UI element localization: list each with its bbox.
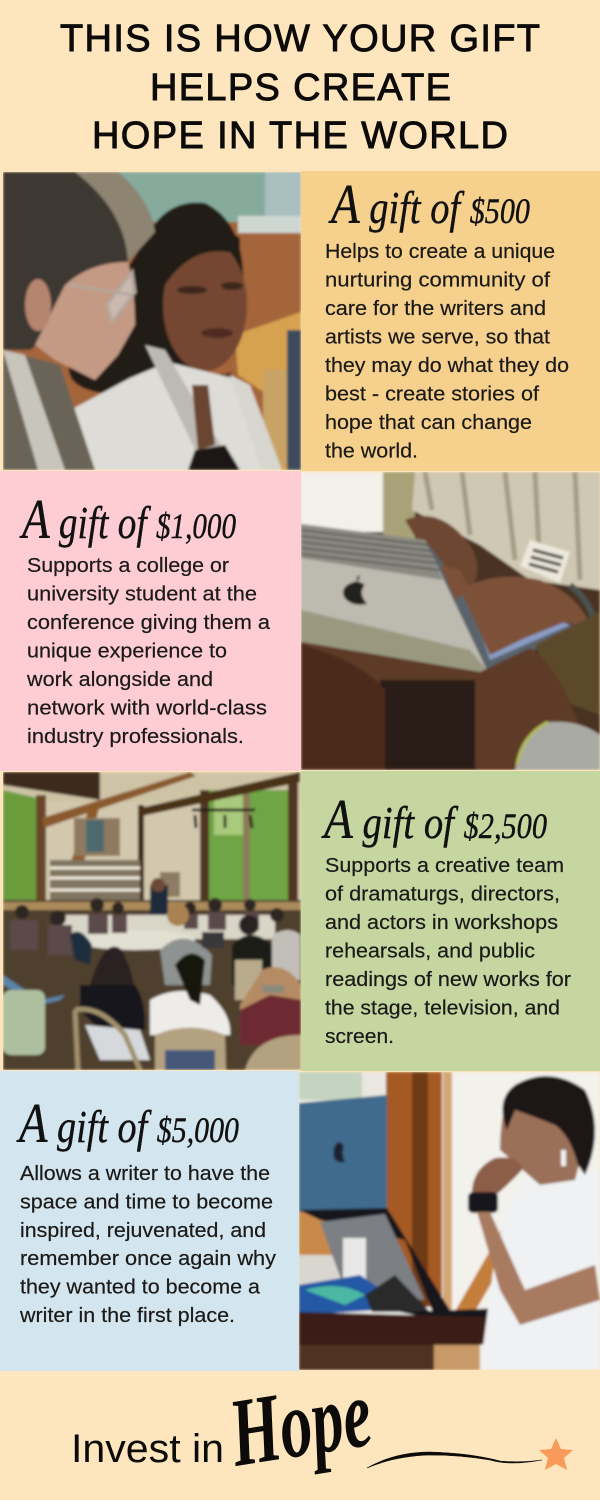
title: HELPS CREATE (150, 67, 451, 109)
text: $500 description: best - create stories of (325, 382, 539, 406)
text: $500 description: Helps to create a unique (325, 240, 555, 263)
title (60, 18, 540, 157)
text: $5,000 description: remember once again why (20, 1247, 277, 1270)
text: $1,000 description: unique experience to (27, 640, 227, 662)
text: $1,000 description (26, 554, 271, 748)
text: $5,000 description: space and time to become (20, 1190, 273, 1213)
text: $500 description: care for the writers and (325, 297, 546, 320)
text: invest in: Invest in (71, 1427, 224, 1471)
text: $1,000 description: university student at the (27, 582, 257, 606)
panel: gift of $1,000 (0, 471, 301, 771)
photo: writer at laptop (299, 1072, 600, 1370)
text: $2,500 description: rehearsals, and public (325, 940, 535, 962)
text: $2,500 description: screen. (325, 1025, 394, 1048)
text: $2,500 description: and actors in workshops (325, 911, 558, 934)
heading: a gift of $5,000: A gift of $5,000 (16, 1093, 239, 1155)
heading: a gift of $500: A gift of $500 (328, 174, 530, 236)
photo: two conference attendees (3, 172, 301, 470)
text: $1,000 description: network with world-class (27, 696, 267, 720)
text: $5,000 description: writer in the first place. (19, 1304, 235, 1327)
text: $2,500 description: of dramaturgs, directors, (325, 882, 560, 906)
text: $2,500 description: Supports a creative team (325, 854, 564, 877)
title: HOPE IN THE WORLD (92, 115, 508, 157)
text: $1,000 description: conference giving them a (27, 611, 271, 634)
text: $500 description: artists we serve, so that (325, 326, 550, 348)
text: $500 description (325, 240, 569, 462)
panel: gift of $500 (301, 171, 600, 471)
panel: gift of $5,000 (0, 1071, 299, 1371)
text: $5,000 description: inspired, rejuvenated, and (20, 1219, 266, 1242)
text: $1,000 description: work alongside and (26, 668, 213, 691)
text: $2,500 description: readings of new works for (325, 968, 571, 991)
heading: a gift of $1,000: A gift of $1,000 (19, 489, 236, 551)
text: $500 description: the world. (325, 440, 418, 462)
title: THIS IS HOW YOUR GIFT (60, 18, 540, 60)
footer: invest in hope (71, 1359, 573, 1487)
text: $5,000 description: Allows a writer to have the (20, 1162, 270, 1185)
text: $500 description: hope that can change (325, 411, 532, 434)
text: $1,000 description: Supports a college or (27, 554, 229, 577)
heading: a gift of $2,500: A gift of $2,500 (321, 789, 547, 851)
text: $1,000 description: industry professionals. (27, 725, 244, 748)
text: $500 description: nurturing community of (325, 268, 550, 292)
text: $2,500 description: the stage, television, and (325, 996, 560, 1020)
icon: orange star (539, 1438, 573, 1470)
arrow: swoosh line (367, 1452, 542, 1468)
text: $500 description: they may do what they do (325, 354, 569, 377)
photo: workshop in a timber hall (3, 772, 301, 1070)
text: $2,500 description (325, 854, 571, 1048)
text: $5,000 description (19, 1162, 277, 1327)
panel: gift of $2,500 (301, 771, 600, 1071)
text: hope: Hope (222, 1359, 378, 1487)
photo: laptop on lap (301, 472, 600, 770)
text: $5,000 description: they wanted to become a (20, 1276, 261, 1299)
